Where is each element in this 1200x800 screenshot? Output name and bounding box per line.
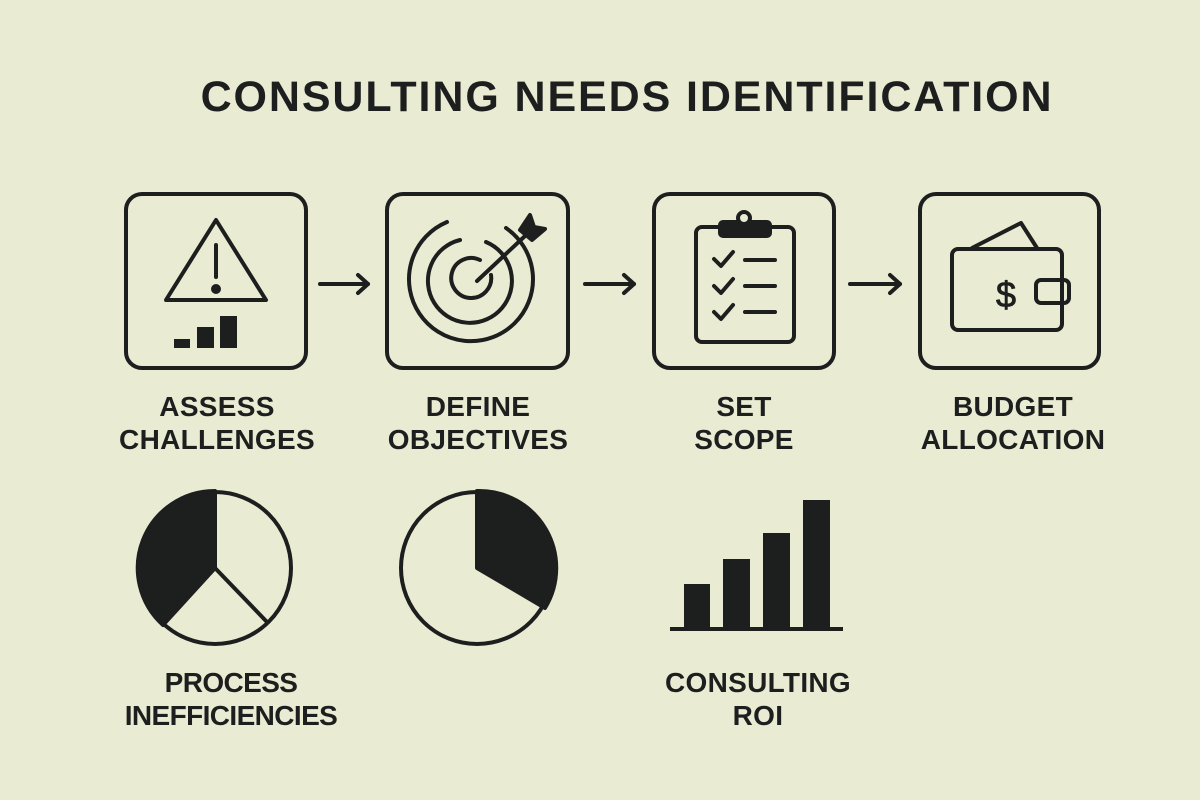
panel: budget allocation bbox=[920, 194, 1099, 368]
label: define objectives: DEFINE bbox=[426, 391, 530, 422]
label: set scope: SET bbox=[716, 391, 772, 422]
label: consulting roi: ROI bbox=[733, 700, 783, 731]
label: process inefficiencies: INEFFICIENCIES bbox=[125, 700, 337, 731]
label: set scope bbox=[694, 391, 794, 455]
label: assess challenges: CHALLENGES bbox=[119, 424, 315, 455]
panel: define objectives bbox=[387, 194, 568, 368]
label: consulting roi bbox=[665, 667, 851, 731]
label: budget allocation: BUDGET bbox=[953, 391, 1073, 422]
icon: warning bbox=[166, 220, 266, 348]
label: define objectives bbox=[388, 391, 568, 455]
bar chart bbox=[670, 500, 843, 631]
label: set scope: SCOPE bbox=[694, 424, 794, 455]
label: assess challenges bbox=[119, 391, 315, 455]
arrow 1 bbox=[320, 275, 368, 293]
icon: target bbox=[409, 215, 545, 341]
label: budget allocation bbox=[921, 391, 1105, 455]
label: process inefficiencies: PROCESS bbox=[165, 667, 297, 698]
label: process inefficiencies bbox=[125, 667, 337, 731]
label: budget allocation: ALLOCATION bbox=[921, 424, 1105, 455]
arrow 3 bbox=[850, 275, 900, 293]
title: CONSULTING NEEDS IDENTIFICATION bbox=[201, 73, 1053, 121]
icon: wallet: $ bbox=[996, 274, 1016, 315]
pie chart 2 bbox=[401, 491, 556, 644]
arrow 2 bbox=[585, 275, 634, 293]
label: assess challenges: ASSESS bbox=[159, 391, 275, 422]
panel: set scope bbox=[654, 194, 834, 368]
icon: wallet bbox=[952, 223, 1069, 330]
icon: clipboard bbox=[696, 212, 794, 342]
label: define objectives: OBJECTIVES bbox=[388, 424, 568, 455]
pie chart 1 bbox=[138, 491, 291, 644]
label: consulting roi: CONSULTING bbox=[665, 667, 851, 698]
panel: assess challenges bbox=[126, 194, 306, 368]
